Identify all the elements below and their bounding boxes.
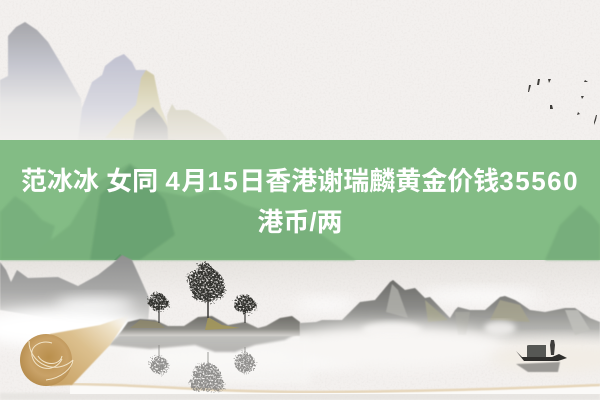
scroll spiral bbox=[29, 341, 73, 368]
title bbox=[21, 166, 579, 237]
scroll disc bbox=[20, 334, 72, 386]
mountain: pale right hill bbox=[167, 104, 228, 140]
birds bbox=[528, 79, 597, 125]
lower-left grey mountains bbox=[0, 255, 150, 325]
mountain: beige peak bbox=[105, 70, 175, 140]
boat with reflection bbox=[516, 340, 567, 372]
mountain: main range bbox=[300, 280, 600, 345]
island hills with reflection bbox=[108, 316, 300, 352]
mountain: small grey peak bbox=[133, 107, 176, 140]
scroll water band bbox=[0, 336, 600, 400]
tree left bbox=[148, 293, 170, 323]
band tree tip bbox=[114, 254, 128, 260]
tree centre bbox=[188, 263, 225, 318]
title: 范冰冰 女同 4月15日香港谢瑞麟黄金价钱35560 bbox=[21, 166, 579, 196]
tree reflections bbox=[150, 345, 255, 391]
mist clouds left bbox=[0, 298, 360, 372]
mist above range bbox=[295, 290, 540, 311]
right mountain range bbox=[285, 280, 600, 372]
scroll tail bbox=[50, 315, 130, 386]
boat cabin bbox=[527, 345, 546, 357]
mountain: tall grey peak bbox=[0, 22, 84, 140]
top-left distant mountains bbox=[0, 22, 228, 140]
title: 港币/两 bbox=[257, 207, 343, 237]
boat hull bbox=[516, 351, 567, 361]
green title band bbox=[0, 140, 600, 260]
boat reflection bbox=[516, 362, 560, 372]
hills reflection bbox=[108, 332, 300, 352]
band mountain silhouettes bbox=[0, 163, 600, 260]
tree right bbox=[234, 295, 257, 323]
mountain: lavender ridge bbox=[78, 54, 150, 140]
gold scroll roll bbox=[20, 315, 130, 386]
hills bbox=[118, 316, 300, 336]
boatman bbox=[550, 340, 555, 355]
mountain: ridge facets bbox=[386, 284, 590, 335]
trees bbox=[148, 263, 257, 391]
mist in front of range bbox=[285, 321, 600, 372]
